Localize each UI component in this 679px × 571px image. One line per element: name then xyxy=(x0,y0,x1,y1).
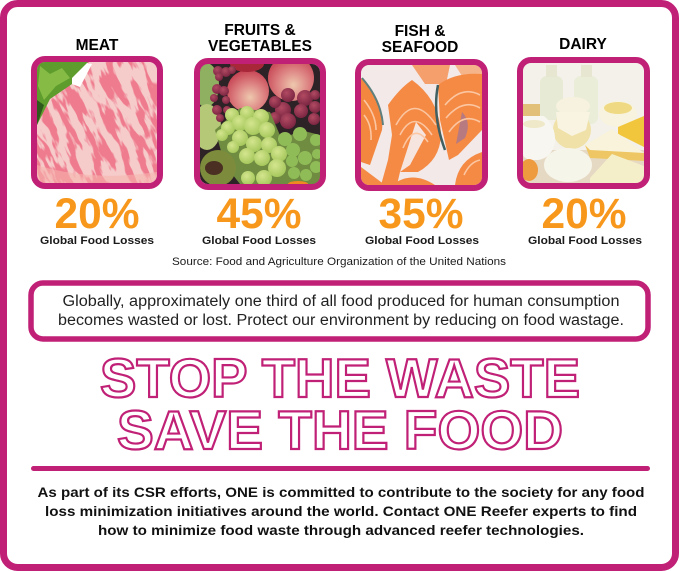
label: meat: Global Food Losses xyxy=(40,235,154,247)
photo: fish and seafood xyxy=(361,65,482,185)
panel: fish and seafood xyxy=(358,23,485,247)
heading: fish and seafood: SEAFOOD xyxy=(382,39,458,56)
photo frame: fish and seafood xyxy=(358,62,485,188)
headline: SAVE THE FOOD xyxy=(117,399,563,461)
body text: As part of its CSR efforts, ONE is committed to contribute to the society for any food xyxy=(38,484,644,500)
photo: fruits and vegetables xyxy=(200,64,320,184)
body text: loss minimization initiatives around the world. Contact ONE Reefer experts to find xyxy=(45,503,637,519)
percentage: meat: 20% xyxy=(54,190,140,238)
photo frame: fruits and vegetables xyxy=(197,61,323,187)
heading: fish and seafood: FISH & xyxy=(395,23,445,40)
label: dairy: Global Food Losses xyxy=(528,235,642,247)
panel: dairy xyxy=(520,36,647,247)
callout text: Globally, approximately one third of all food produced for human consumption xyxy=(62,293,620,310)
panel: meat xyxy=(31,39,163,244)
heading: fruits and vegetables: VEGETABLES xyxy=(208,38,312,55)
percentage: fruits and vegetables: 45% xyxy=(216,190,302,238)
photo: dairy xyxy=(520,63,644,184)
photo frame: dairy xyxy=(520,60,647,186)
percentage: dairy: 20% xyxy=(542,190,626,238)
callout box xyxy=(31,283,648,339)
divider rule xyxy=(31,466,650,471)
label: fruits and vegetables: Global Food Losses xyxy=(202,235,316,247)
body text: how to minimize food waste through advanced reefer technologies. xyxy=(98,522,584,538)
photo: meat xyxy=(37,62,157,183)
percentage: fish and seafood: 35% xyxy=(378,190,464,238)
source note: Source: Food and Agriculture Organization of the United Nations xyxy=(172,256,507,268)
heading: dairy: DAIRY xyxy=(559,36,607,53)
callout text: becomes wasted or lost. Protect our environment by reducing on food wastage. xyxy=(58,312,624,329)
headline: STOP THE WASTE xyxy=(100,347,580,409)
heading: meat: MEAT xyxy=(76,37,119,54)
heading: fruits and vegetables: FRUITS & xyxy=(224,22,296,39)
headline xyxy=(100,347,580,461)
panel: fruits and vegetables xyxy=(193,22,323,247)
label: fish and seafood: Global Food Losses xyxy=(365,235,479,247)
photo frame: meat xyxy=(34,59,160,186)
